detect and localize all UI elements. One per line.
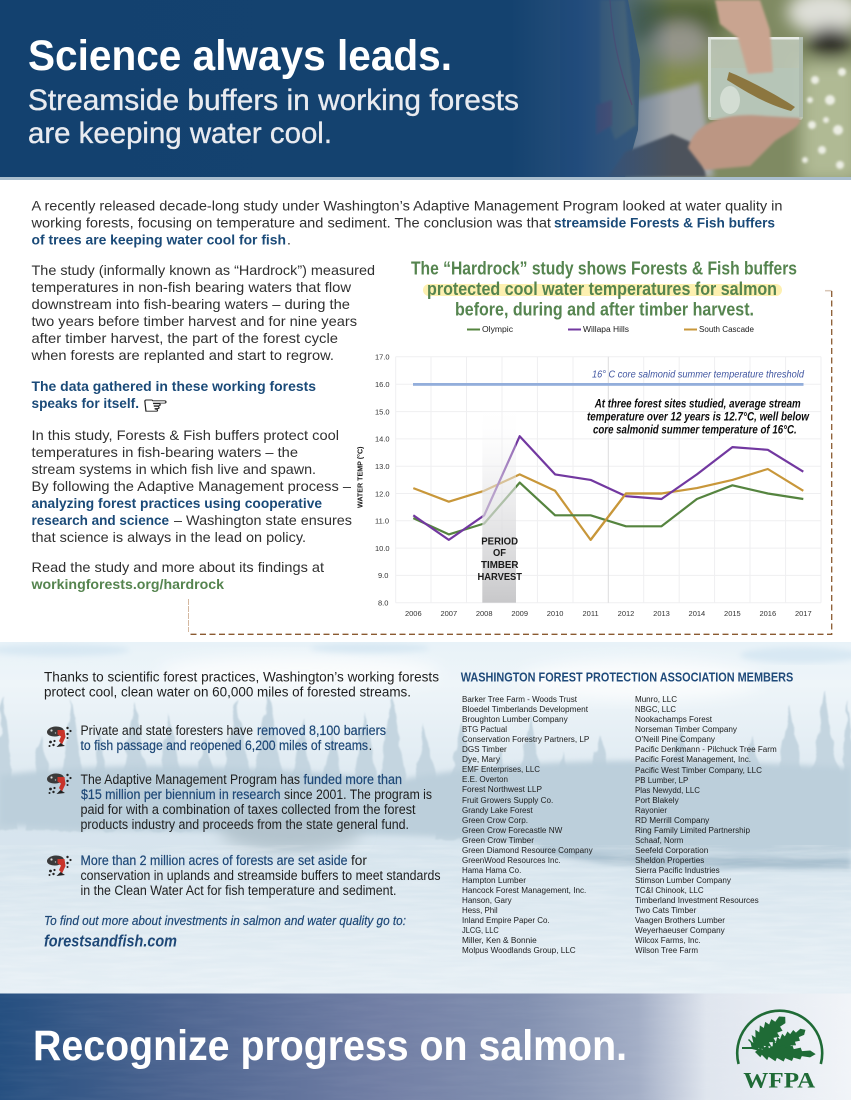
adaptive management text: In this study, Forests & Fish buffers protect cool — [32, 427, 339, 443]
timber harvest band — [482, 401, 516, 603]
chart callout — [587, 399, 810, 437]
intro paragraph: working forests, focusing on temperature and sediment. The conclusion was that — [30, 215, 551, 231]
members column 2: O’Neill Pine Company — [635, 735, 715, 744]
members column 2: TC&I Chinook, LLC — [635, 886, 704, 895]
y-axis labels: 16.0 — [375, 380, 390, 389]
forest and river background — [0, 642, 851, 994]
bullet: research funding: The Adaptive Management Program has — [80, 772, 300, 787]
title: Science always leads. — [28, 32, 452, 80]
study description text: after timber harvest, the part of the forest cycle — [32, 330, 338, 346]
chart heading — [411, 259, 797, 320]
x-axis labels: 2017 — [795, 609, 812, 618]
study description text: when forests are replanted and start to regrow. — [30, 347, 334, 363]
members column 2: Wilson Tree Farm — [635, 946, 698, 955]
x-axis labels: 2014 — [689, 609, 705, 618]
chart gridlines — [396, 357, 821, 603]
header banner — [0, 0, 851, 182]
bullet: barriers removed: removed 8,100 barriers — [257, 723, 386, 738]
intro paragraph: . — [287, 232, 291, 248]
bullet: barriers removed: . — [368, 738, 372, 753]
members column 1: Hess, Phil — [462, 906, 498, 915]
chart heading: The “Hardrock” study shows Forests & Fish buffers — [411, 259, 797, 279]
pine branch — [742, 1009, 816, 1063]
intro paragraph: of trees are keeping water cool for fish — [32, 232, 286, 248]
members column 2: Stimson Lumber Company — [635, 876, 731, 885]
members column 2 — [635, 695, 777, 955]
forest practices intro: Thanks to scientific forest practices, Washington’s working forests — [44, 669, 439, 684]
members column 2: Ring Family Limited Partnership — [635, 826, 751, 835]
members column 1: Barker Tree Farm - Woods Trust — [462, 695, 578, 704]
members heading: WASHINGTON FOREST PROTECTION ASSOCIATION MEMBERS — [461, 670, 793, 684]
members column 1: Inland Empire Paper Co. — [462, 916, 550, 925]
members column 2: Pacific West Timber Company, LLC — [635, 766, 762, 775]
chart callout: At three forest sites studied, average stream — [594, 399, 801, 411]
members column 1: Green Crow Timber — [462, 836, 534, 845]
members column 1: Hama Hama Co. — [462, 866, 521, 875]
members column 2: Sierra Pacific Industries — [635, 866, 720, 875]
x-axis labels: 2008 — [476, 609, 493, 618]
bullet: barriers removed — [46, 723, 386, 753]
logo wordmark: WFPA — [743, 1067, 815, 1092]
bullet: acres set aside: conservation in uplands and streamside buffers to meet standards — [80, 868, 441, 883]
members column 2: Seefeld Corporation — [635, 846, 708, 855]
timber harvest label — [478, 535, 523, 583]
y-axis labels: 9.0 — [378, 571, 388, 580]
threshold line — [413, 383, 804, 386]
members column 1: JLCG, LLC — [462, 926, 499, 935]
members column 2: Plas Newydd, LLC — [635, 786, 700, 795]
read more link: Read the study and more about its findings at — [32, 559, 324, 575]
adaptive management text: – Washington state ensures — [174, 512, 352, 528]
members column 2: Nookachamps Forest — [635, 715, 713, 724]
members column 1: Green Crow Corp. — [462, 816, 528, 825]
timber harvest label: TIMBER — [481, 559, 519, 571]
members column 2: Two Cats Timber — [635, 906, 697, 915]
WFPA logo — [737, 1009, 822, 1092]
members column 1: E.E. Overton — [462, 775, 508, 784]
members column 2: NBGC, LLC — [635, 705, 676, 714]
members column 1: Green Diamond Resource Company — [462, 846, 593, 855]
members column 1 — [462, 695, 593, 955]
y-axis labels: 12.0 — [375, 489, 390, 498]
dashed chart frame — [187, 291, 832, 634]
x-axis labels — [405, 609, 812, 618]
bullet: barriers removed: Private and state foresters have — [80, 723, 253, 738]
adaptive management text — [32, 427, 352, 545]
members column 2: Port Blakely — [635, 796, 679, 805]
icon: salmon — [46, 726, 72, 747]
x-axis labels: 2007 — [440, 609, 457, 618]
chart heading: before, during and after timber harvest. — [455, 300, 754, 320]
read more link — [30, 559, 324, 592]
adaptive management text: analyzing forest practices using cooperative — [32, 495, 322, 511]
read more link: workingforests.org/hardrock — [30, 576, 224, 592]
x-axis labels: 2006 — [405, 609, 422, 618]
x-axis labels: 2009 — [511, 609, 528, 618]
study description text: temperatures in non-fish bearing waters that flow — [32, 279, 352, 295]
members column 2: Rayonier — [635, 806, 667, 815]
bullet: acres set aside: in the Clean Water Act for fish temperature and sediment. — [80, 883, 396, 898]
forest practices intro — [44, 669, 439, 700]
y-axis labels: 17.0 — [375, 352, 390, 362]
chart legend — [467, 325, 755, 334]
footer banner — [0, 994, 851, 1100]
members column 1: Green Crow Forecastle NW — [462, 826, 563, 835]
chart legend: South Cascade — [699, 325, 755, 334]
x-axis labels: 2013 — [653, 609, 670, 618]
intro paragraph: streamside Forests & Fish buffers — [554, 215, 775, 231]
series: Willapa Hills — [413, 436, 803, 540]
members list — [461, 670, 793, 955]
members column 1: Conservation Forestry Partners, LP — [462, 735, 589, 744]
x-axis labels: 2015 — [724, 609, 741, 618]
study description text — [30, 262, 375, 363]
adaptive management text: By following the Adaptive Management process – — [32, 478, 351, 494]
data callout with pointing hand: The data gathered in these working forests — [32, 378, 316, 394]
members column 1: Forest Northwest LLP — [462, 785, 542, 794]
bullet: research funding — [46, 772, 432, 832]
bullet: acres set aside: More than 2 million acres of forests are set aside — [80, 853, 348, 868]
chart callout: core salmonid summer temperature of 16°C. — [593, 425, 797, 437]
members column 2: Vaagen Brothers Lumber — [635, 916, 725, 925]
members column 1: Broughton Lumber Company — [462, 715, 568, 724]
study description text: The study (informally known as “Hardrock”) measured — [32, 262, 375, 278]
members column 1: Hancock Forest Management, Inc. — [462, 886, 586, 895]
x-axis labels: 2012 — [618, 609, 634, 618]
y-axis labels: 13.0 — [375, 462, 390, 471]
line chart: water temperature 2006-2017 — [357, 352, 821, 618]
members column 2: Sheldon Properties — [635, 856, 704, 865]
chart legend: Olympic — [482, 325, 513, 334]
y-axis labels: 15.0 — [375, 407, 390, 416]
study description text: two years before timber harvest and for nine years — [32, 313, 357, 329]
members column 2: Pacific Denkmann - Pilchuck Tree Farm — [635, 745, 777, 754]
members column 2: Weyerhaeuser Company — [635, 926, 725, 935]
members column 1: BTG Pactual — [462, 725, 507, 734]
icon: salmon — [46, 855, 72, 876]
members column 1: Hampton Lumber — [462, 876, 526, 885]
timber harvest label: HARVEST — [478, 571, 523, 583]
series: Olympic — [413, 483, 803, 534]
footer slogan: Recognize progress on salmon. — [33, 1022, 627, 1070]
intro paragraph: A recently released decade-long study under Washington’s Adaptive Management Program looked at water quality in — [32, 198, 782, 214]
members column 2: Norseman Timber Company — [635, 725, 737, 734]
more information link: To find out more about investments in salmon and water quality go to: — [44, 914, 406, 928]
members column 1: DGS Timber — [462, 745, 507, 754]
redraw of South Cascade where it crosses — [591, 494, 662, 540]
bullet: research funding: products industry and proceeds from the state general fund. — [80, 817, 409, 832]
bullet: research funding: since 2001. The program is — [284, 787, 432, 802]
threshold label: 16° C core salmonid summer temperature threshold — [592, 370, 804, 381]
bullet: barriers removed: to fish passage and reopened 6,200 miles of streams — [80, 738, 368, 753]
x-axis labels: 2010 — [547, 609, 563, 618]
x-axis labels: 2011 — [583, 609, 599, 618]
bullet: research funding: $15 million per biennium in research — [81, 787, 280, 802]
members column 2: Pacific Forest Management, Inc. — [635, 755, 751, 764]
study description text: downstream into fish-bearing waters – during the — [32, 296, 350, 312]
members column 1: EMF Enterprises, LLC — [462, 765, 540, 774]
members column 1: Miller, Ken & Bonnie — [462, 936, 537, 945]
series: South Cascade — [413, 469, 803, 540]
y-axis labels: 10.0 — [375, 544, 390, 553]
members column 1: Hanson, Gary — [462, 896, 512, 905]
members column 2: Timberland Investment Resources — [635, 896, 759, 905]
adaptive management text: temperatures in fish-bearing waters – the — [32, 444, 298, 460]
adaptive management text: research and science — [32, 512, 169, 528]
icon: salmon — [46, 773, 72, 794]
members column 1: Grandy Lake Forest — [462, 806, 533, 815]
data callout with pointing hand: speaks for itself. — [32, 395, 139, 411]
chart callout: temperature over 12 years is 12.7°C, well below — [587, 412, 810, 424]
members column 1: Molpus Woodlands Group, LLC — [462, 946, 576, 955]
timber harvest label: PERIOD — [481, 535, 518, 547]
members column 1: GreenWood Resources Inc. — [462, 856, 561, 865]
intro paragraph — [30, 198, 783, 248]
bullet: acres set aside: for — [351, 853, 368, 868]
chart legend: Willapa Hills — [583, 325, 629, 334]
y-axis labels: 8.0 — [378, 598, 388, 608]
timber harvest label: OF — [493, 547, 507, 559]
members column 2: PB Lumber, LP — [635, 776, 688, 785]
y-axis title: WATER TEMP (°C) — [357, 446, 365, 508]
adaptive management text: stream systems in which fish live and spawn. — [32, 461, 316, 477]
members column 1: Fruit Growers Supply Co. — [462, 796, 553, 805]
more information link — [44, 914, 406, 951]
y-axis labels: 14.0 — [375, 435, 390, 444]
header photo: hands holding a fish in a glass — [579, 0, 851, 177]
bullet: research funding: paid for with a combination of taxes collected from the forest — [80, 802, 416, 817]
chart heading: protected cool water temperatures for salmon — [427, 279, 777, 299]
members column 1: Dye, Mary — [462, 755, 500, 764]
members column 1: Bloedel Timberlands Development — [462, 705, 589, 714]
icon: pointing hand: ☞ — [142, 391, 169, 420]
bullet: acres set aside — [46, 853, 441, 898]
subtitle — [28, 84, 519, 150]
bullet: research funding: funded more than — [304, 772, 402, 787]
x-axis labels: 2016 — [759, 609, 776, 618]
data callout with pointing hand — [32, 378, 316, 420]
members column 2: Wilcox Farms, Inc. — [635, 936, 701, 945]
subtitle: are keeping water cool. — [28, 117, 332, 150]
members column 2: Schaaf, Norm — [635, 836, 684, 845]
y-axis labels — [375, 352, 390, 608]
members column 2: Munro, LLC — [635, 695, 677, 704]
y-axis labels: 11.0 — [375, 517, 389, 526]
forest practices intro: protect cool, clean water on 60,000 miles of forested streams. — [44, 685, 411, 700]
more information link: forestsandfish.com — [44, 933, 177, 951]
adaptive management text: that science is always in the lead on policy. — [32, 529, 306, 545]
members column 2: RD Merrill Company — [635, 816, 709, 825]
subtitle: Streamside buffers in working forests — [28, 84, 519, 117]
